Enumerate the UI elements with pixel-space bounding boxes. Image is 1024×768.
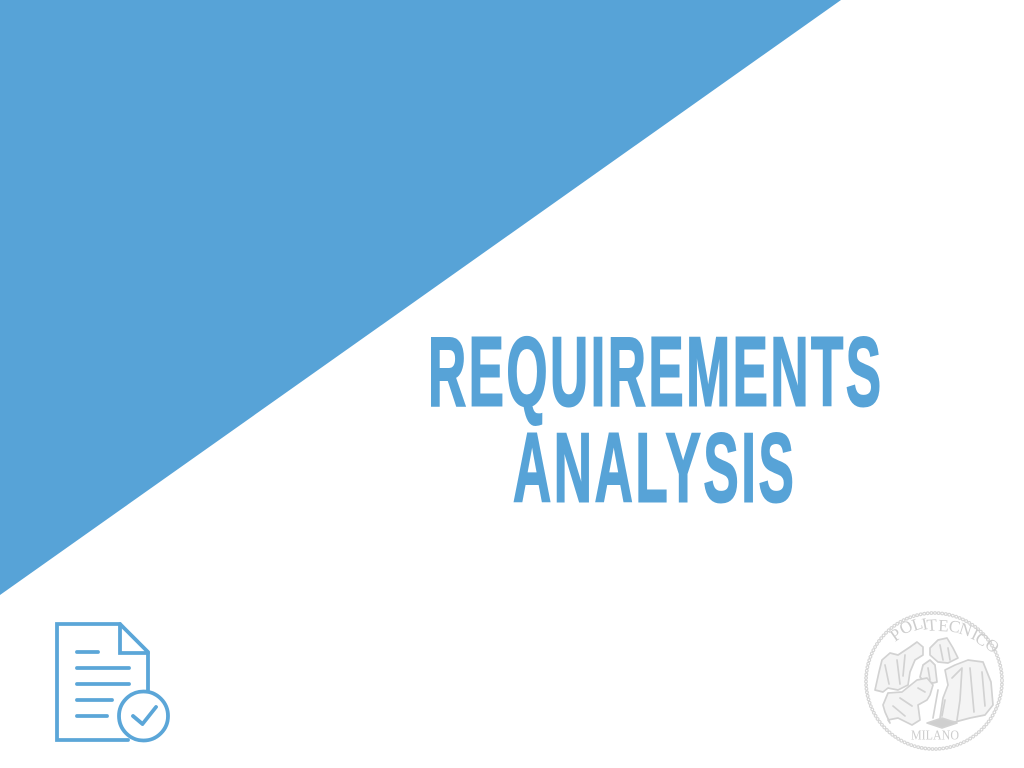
title [428,317,883,523]
seal figures [875,638,993,728]
title: REQUIREMENTS [428,317,883,427]
diagonal blue background triangle [0,0,841,595]
title: ANALYSIS [513,413,796,523]
seal lettering: city: MILANO [911,728,959,742]
icon: document with check mark [57,624,168,740]
seal lettering: POLITECNICO [886,614,1003,657]
logo: Politecnico di Milano seal [866,613,1003,749]
